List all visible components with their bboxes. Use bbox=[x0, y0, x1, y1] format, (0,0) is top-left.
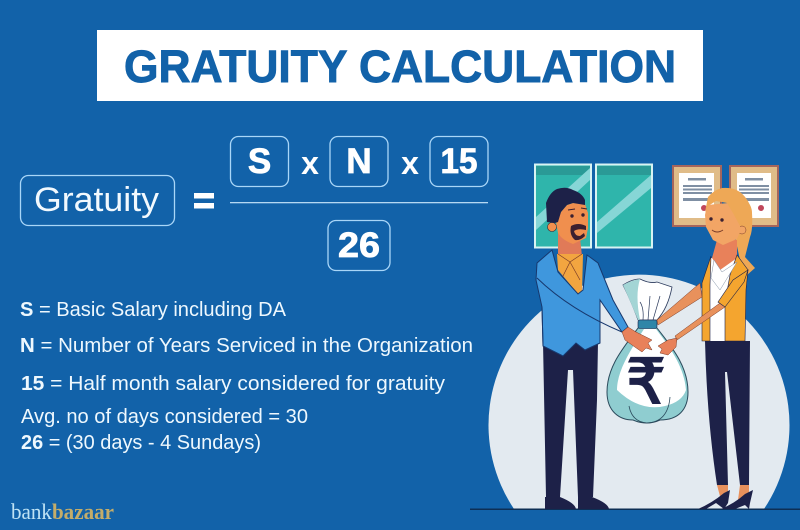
trousers bbox=[543, 342, 598, 497]
bag tie bbox=[638, 320, 657, 328]
framed certificates bbox=[673, 166, 778, 226]
head bbox=[705, 203, 740, 245]
bankbazaar logo: bankbazaar bbox=[11, 499, 114, 524]
head bbox=[556, 203, 588, 244]
cardigan bbox=[702, 255, 748, 341]
blazer sleeve line bbox=[537, 278, 622, 332]
legs and heels bbox=[717, 485, 728, 500]
title banner: GRATUITY CALCULATION bbox=[124, 41, 676, 92]
trousers bbox=[705, 341, 750, 485]
shoes bbox=[545, 497, 576, 509]
neck bbox=[712, 240, 737, 270]
hand bbox=[658, 338, 677, 355]
hair bbox=[705, 188, 752, 226]
neck bbox=[558, 232, 582, 256]
collar bbox=[711, 260, 737, 290]
floor line bbox=[470, 508, 800, 510]
illustration: handing over gratuity bbox=[470, 164, 800, 510]
15 box: 15 bbox=[440, 142, 478, 181]
eyes and smile bbox=[709, 217, 713, 221]
windows bbox=[535, 164, 652, 248]
sleeve bbox=[718, 270, 748, 307]
shirt bbox=[557, 254, 583, 294]
N box bbox=[330, 136, 388, 186]
rupee symbol: ₹ bbox=[626, 348, 666, 417]
man's hand bbox=[622, 327, 652, 352]
15 definition: 15 = Half month salary considered for gratuity bbox=[21, 373, 445, 395]
average days note: Avg. no of days considered = 30 bbox=[21, 406, 308, 428]
multiply sign: x bbox=[401, 145, 419, 181]
man bbox=[536, 188, 628, 509]
15 box bbox=[430, 136, 488, 186]
gratuity label box: Gratuity bbox=[34, 181, 159, 219]
N box: N bbox=[346, 142, 372, 181]
blazer bbox=[536, 250, 628, 356]
money bag bbox=[607, 279, 688, 423]
S definition: S = Basic Salary including DA bbox=[20, 299, 287, 321]
formula bbox=[20, 136, 488, 270]
S box: S bbox=[248, 142, 271, 181]
background circle bbox=[488, 275, 789, 509]
26 definition: 26 = (30 days - 4 Sundays) bbox=[21, 432, 261, 454]
S box bbox=[230, 136, 288, 186]
arms bbox=[657, 283, 702, 325]
hair back bbox=[735, 195, 755, 275]
gratuity label box bbox=[20, 176, 174, 226]
equals sign bbox=[194, 193, 214, 208]
bag ruffle bbox=[623, 279, 672, 320]
multiply sign: x bbox=[301, 145, 319, 181]
hair bbox=[546, 188, 585, 223]
woman bbox=[657, 188, 755, 509]
goatee and eyes bbox=[570, 224, 586, 240]
26 box bbox=[328, 220, 390, 270]
bag body bbox=[607, 328, 688, 423]
legend text bbox=[20, 299, 473, 454]
title banner bbox=[97, 30, 703, 101]
white shirt bbox=[709, 258, 738, 341]
ear bbox=[738, 226, 746, 234]
26 box: 26 bbox=[338, 226, 380, 265]
N definition: N = Number of Years Serviced in the Organization bbox=[20, 335, 473, 357]
ear bbox=[548, 222, 556, 232]
fraction line bbox=[230, 202, 488, 203]
